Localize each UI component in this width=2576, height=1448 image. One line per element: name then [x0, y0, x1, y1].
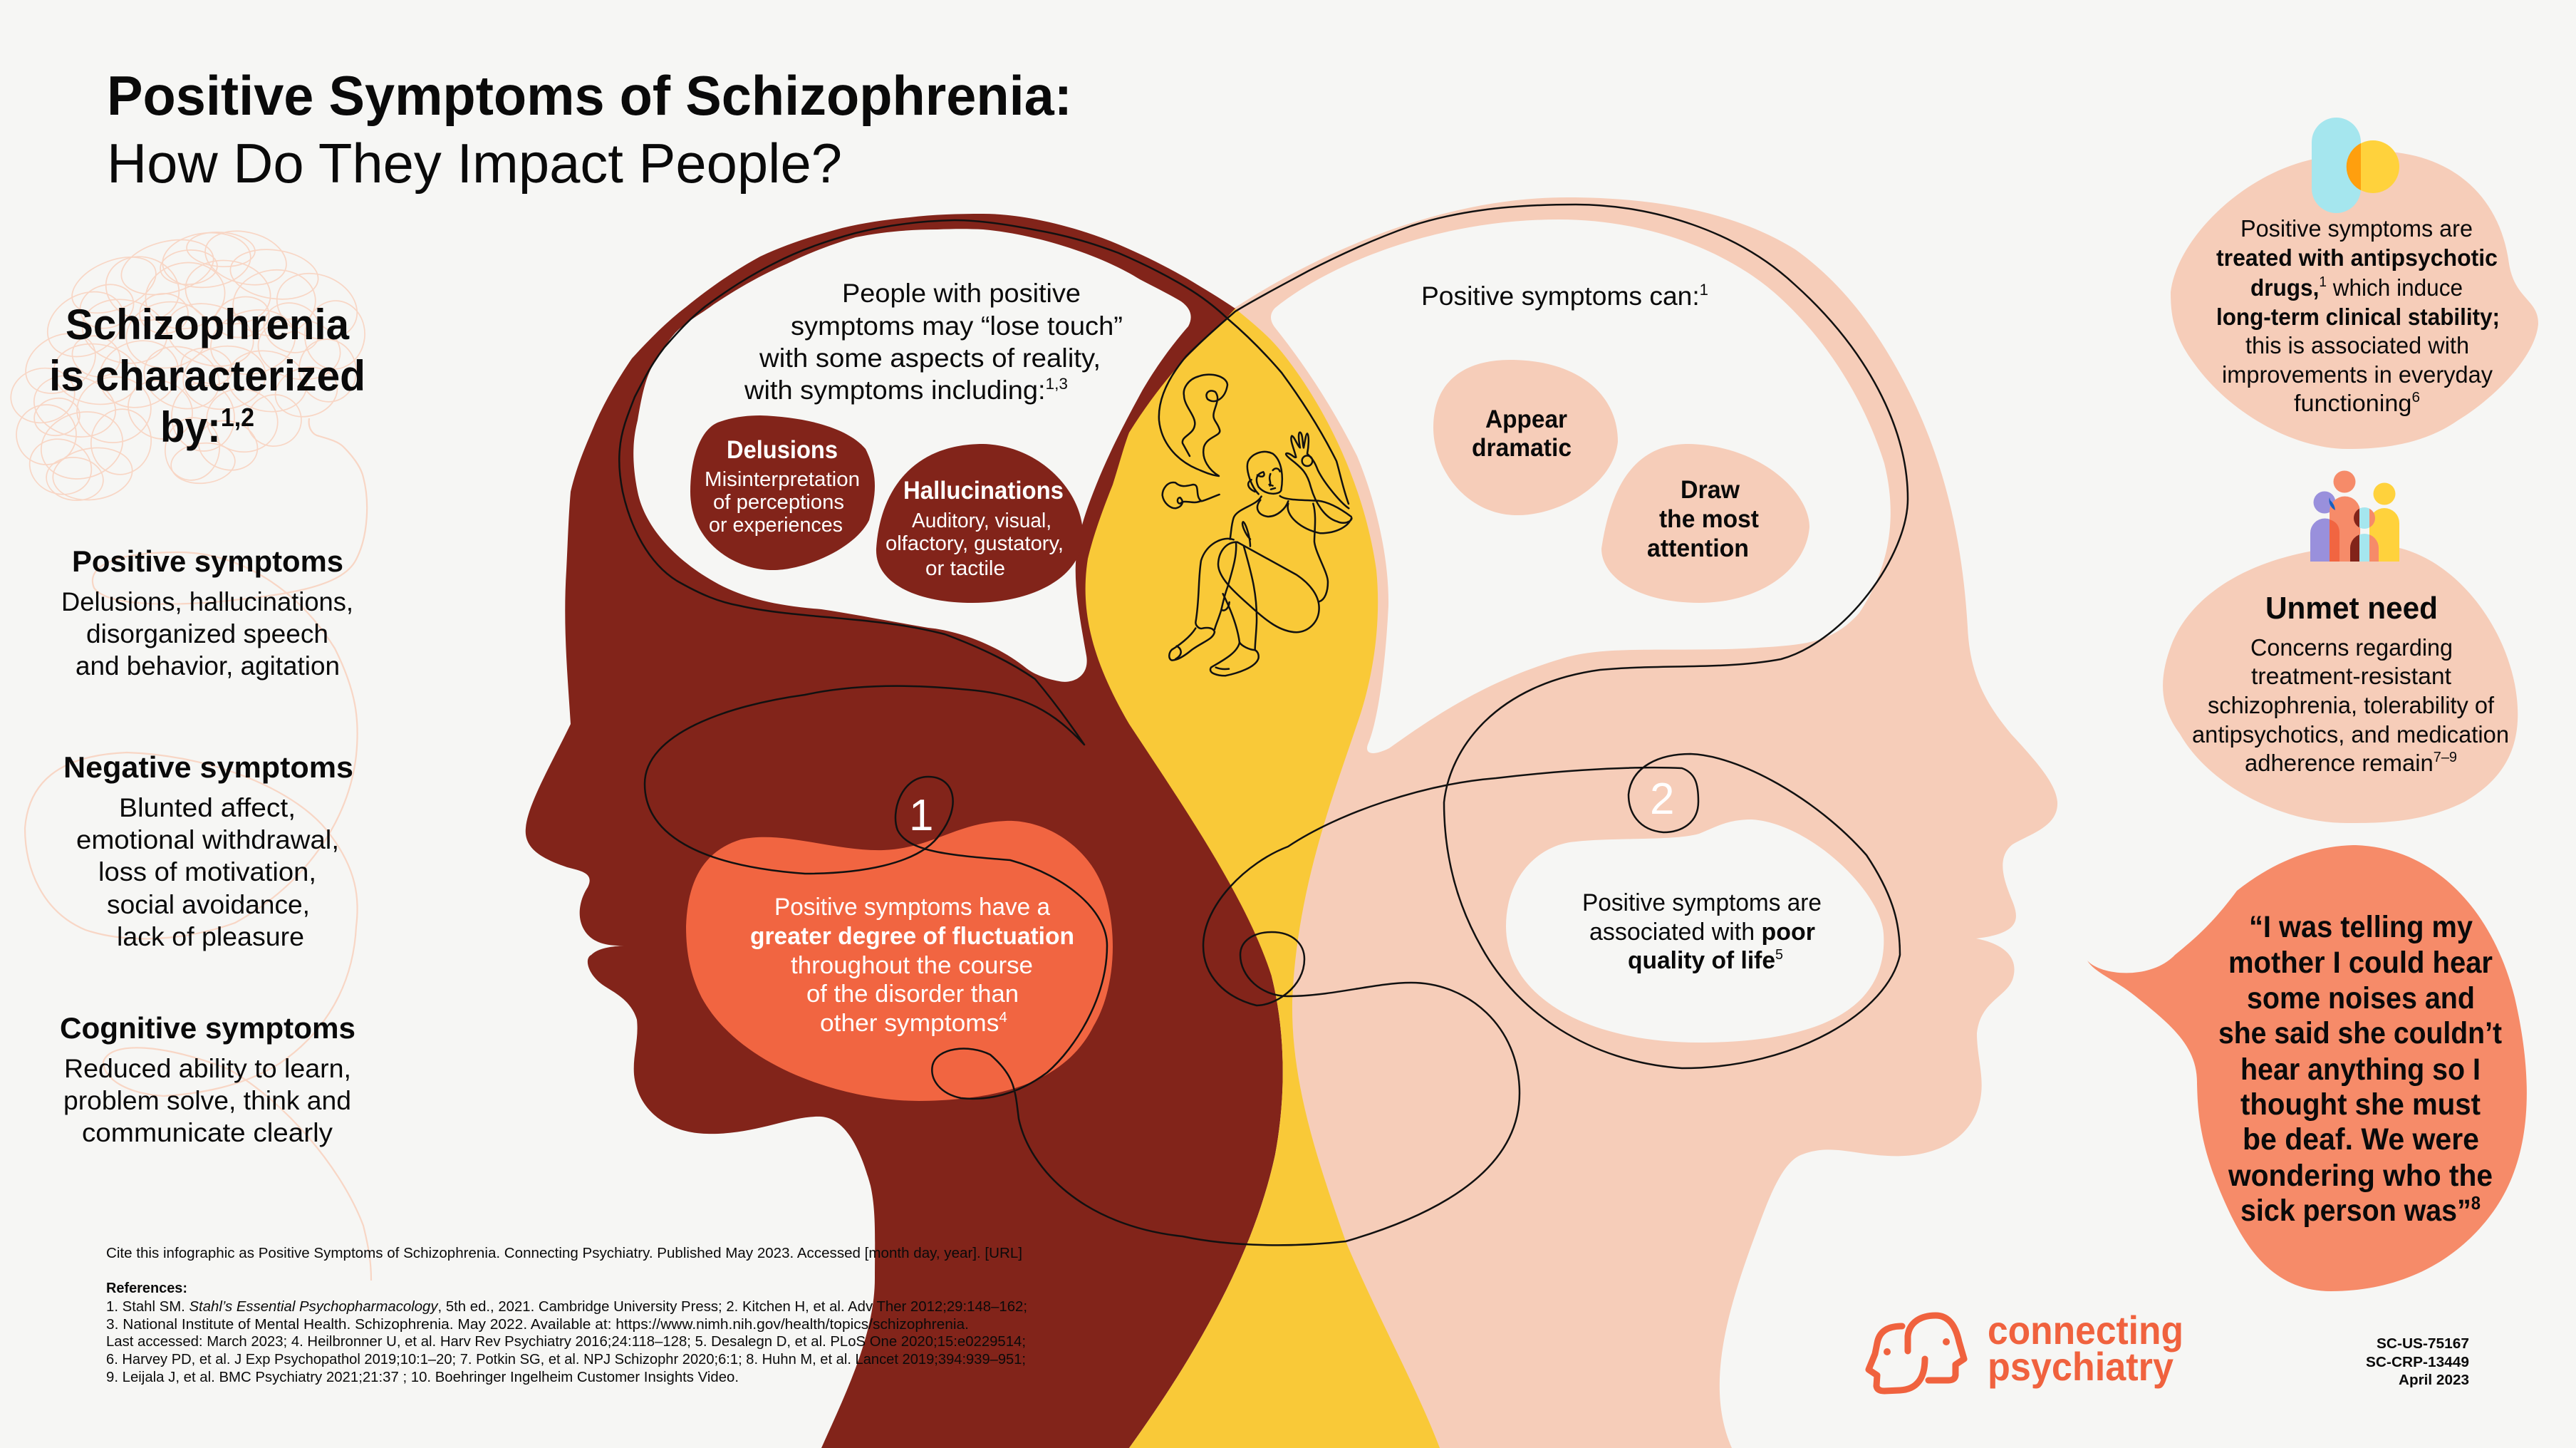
panel: patient quote speech bubble: sick person was” — [2240, 1194, 2493, 1228]
panel: antipsychotic treatment: improvements in everyday — [2222, 361, 2493, 388]
panel: antipsychotic treatment: Positive symptoms are — [2240, 215, 2473, 242]
text block: negative symptoms: lack of pleasure — [117, 922, 304, 951]
bubble: draw the most attention: Draw — [1681, 476, 1740, 504]
text block: positive symptoms — [61, 544, 353, 681]
bubble: delusions: Delusions — [727, 436, 838, 464]
bubble: hallucinations: or tactile — [925, 557, 1005, 580]
left column heading — [49, 301, 365, 451]
text block: negative symptoms — [63, 750, 353, 951]
citation and references: 9. Leijala J, et al. BMC Psychiatry 2021;21:37 ; 10. Boehringer Ingelheim Customer Insights Video. — [106, 1369, 739, 1385]
panel: antipsychotic treatment: this is associated with — [2245, 332, 2469, 358]
panel: patient quote speech bubble: wondering who the — [2228, 1159, 2493, 1193]
bubble: delusions: Misinterpretation — [705, 468, 860, 491]
text block: cognitive symptoms: Reduced ability to learn, — [64, 1054, 351, 1083]
left column heading: 1,2 — [221, 403, 254, 432]
text: positive symptoms can: Positive symptoms can: — [1421, 281, 1698, 311]
left column heading: by: — [160, 403, 224, 451]
bubble: hallucinations: olfactory, gustatory, — [886, 532, 1064, 555]
citation and references: 6. Harvey PD, et al. J Exp Psychopathol 2019;10:1–20; 7. Potkin SG, et al. NPJ Schizophr 2020;6:1; 8. Huhn M, et al. Lancet 2019;394:939–951; — [106, 1351, 1026, 1367]
panel: left head brain text: with symptoms including: — [744, 376, 1037, 405]
icon: pill capsules — [2312, 118, 2399, 213]
text block: negative symptoms: loss of motivation, — [98, 857, 316, 886]
panel: unmet need: 7–9 — [2434, 750, 2457, 765]
icon: two head outlines — [1869, 1315, 1964, 1391]
text block: cognitive symptoms — [60, 1011, 355, 1147]
logo: connecting psychiatry: psychiatry — [1988, 1344, 2174, 1389]
panel: antipsychotic treatment: drugs, — [2250, 274, 2319, 301]
panel: left head brain text: 1,3 — [1046, 375, 1068, 393]
panel: unmet need — [2163, 470, 2518, 823]
text block: cognitive symptoms: Cognitive symptoms — [60, 1011, 355, 1045]
citation and references: Last accessed: March 2023; 4. Heilbronner U, et al. Harv Rev Psychiatry 2016;24:118–128; 5. Desalegn D, et al. PLoS One 2020;15:e0229514; — [106, 1333, 1026, 1350]
text: quality of life: 5 — [1775, 947, 1783, 963]
panel: unmet need: Unmet need — [2265, 591, 2438, 626]
bubble: hallucinations: Auditory, visual, — [912, 510, 1051, 532]
panel: patient quote speech bubble: 8 — [2471, 1192, 2481, 1214]
yellow overlap of the two heads — [1086, 309, 1440, 1448]
panel: patient quote speech bubble — [2087, 845, 2527, 1291]
text: quality of life: associated with poor — [1589, 919, 1815, 946]
citation and references: 1. Stahl SM. Stahl’s Essential Psychopharmacology, 5th ed., 2021. Cambridge University Press; 2. Kitchen H, et al. Adv Ther 2012;29:148–162; — [106, 1298, 1027, 1315]
panel: antipsychotic treatment: treated with antipsychotic — [2216, 244, 2498, 271]
text block: cognitive symptoms: problem solve, think and — [63, 1086, 351, 1115]
text: fluctuation: of the disorder than — [806, 981, 1019, 1008]
text: fluctuation: 4 — [999, 1010, 1007, 1025]
text block: negative symptoms: social avoidance, — [107, 890, 310, 919]
text: fluctuation: Positive symptoms have a — [774, 894, 1050, 921]
panel: patient quote speech bubble: she said she couldn’t — [2218, 1016, 2502, 1050]
panel: patient quote speech bubble: be deaf. We were — [2243, 1122, 2479, 1157]
text block: positive symptoms: Positive symptoms — [72, 544, 343, 578]
text block: negative symptoms: Blunted affect, — [119, 793, 296, 822]
panel: patient quote speech bubble: mother I could hear — [2228, 946, 2493, 980]
text: quality of life: Positive symptoms are — [1582, 889, 1822, 916]
text: fluctuation: throughout the course — [791, 952, 1033, 979]
text: quality of life — [1582, 889, 1822, 974]
left column heading: is characterized — [49, 352, 365, 400]
bubble: appear dramatic: Appear — [1485, 405, 1567, 433]
bubble: delusions: or experiences — [709, 514, 843, 537]
illustration: seated person with hand raised — [1163, 433, 1351, 676]
panel: left head brain text: with some aspects of reality, — [759, 343, 1101, 373]
orange bubble shape — [686, 821, 1113, 1101]
document codes: SC-US-75167 — [2377, 1336, 2469, 1352]
text block: negative symptoms: Negative symptoms — [63, 750, 353, 784]
text block: cognitive symptoms: communicate clearly — [82, 1118, 333, 1147]
panel: patient quote speech bubble: some noises and — [2247, 981, 2475, 1015]
panel: patient quote speech bubble: “I was telling my — [2249, 910, 2473, 944]
panel: left head brain text: People with positive — [842, 279, 1081, 308]
panel: antipsychotic treatment: which induce — [2327, 274, 2463, 301]
panel: unmet need: schizophrenia, tolerability of — [2208, 692, 2495, 718]
panel: patient quote speech bubble: hear anything so I — [2240, 1053, 2481, 1087]
logo: connecting psychiatry: connecting — [1988, 1308, 2183, 1353]
citation and references: 3. National Institute of Mental Health. Schizophrenia. May 2022. Available at: https://www.nimh.nih.gov/health/topics/schizophrenia. — [106, 1316, 969, 1333]
right head silhouette — [1232, 197, 2057, 1448]
text: fluctuation: greater degree of fluctuation — [750, 923, 1074, 950]
text: fluctuation: other symptoms — [820, 1010, 992, 1037]
white bubble shape — [1506, 819, 1884, 1043]
left column heading: Schizophrenia — [66, 301, 350, 348]
bubble: draw the most attention: the most — [1659, 505, 1759, 533]
left head silhouette — [526, 214, 1318, 1448]
document codes: April 2023 — [2399, 1372, 2469, 1388]
citation and references: References: — [106, 1280, 187, 1296]
panel: unmet need: treatment-resistant — [2251, 663, 2451, 689]
text: positive symptoms can: 1 — [1700, 281, 1708, 299]
panel: left head brain text — [744, 279, 1123, 405]
title: How Do They Impact People? — [107, 132, 842, 195]
icon: group of people — [2310, 470, 2399, 562]
number 2: 2 — [1650, 775, 1674, 824]
bubble: draw the most attention: attention — [1647, 534, 1749, 562]
panel: antipsychotic treatment: 6 — [2411, 390, 2420, 405]
bubble: draw the most attention — [1601, 444, 1809, 603]
text block: positive symptoms: Delusions, hallucinations, — [61, 587, 353, 616]
bubble: hallucinations: Hallucinations — [903, 477, 1064, 505]
panel: left head brain text: symptoms may “lose touch” — [791, 311, 1123, 341]
title — [107, 64, 1072, 195]
panel: unmet need: antipsychotics, and medication — [2192, 721, 2509, 748]
decorative pink thread — [25, 418, 371, 1281]
bubble: delusions — [690, 415, 875, 570]
text block: positive symptoms: disorganized speech — [86, 619, 328, 648]
panel: patient quote speech bubble: thought she must — [2240, 1087, 2481, 1122]
bubble: appear dramatic: dramatic — [1472, 434, 1572, 462]
panel: antipsychotic treatment: 1 — [2319, 274, 2327, 290]
number 1: 1 — [909, 791, 933, 840]
bubble: appear dramatic — [1433, 360, 1618, 515]
logo: connecting psychiatry — [1869, 1308, 2183, 1391]
panel: unmet need: adherence remain — [2245, 750, 2434, 776]
text: fluctuation — [750, 894, 1074, 1037]
panel: antipsychotic treatment: long-term clinical stability; — [2216, 304, 2500, 330]
document codes — [2366, 1336, 2469, 1388]
citation and references — [106, 1245, 1027, 1385]
panel: antipsychotic treatment — [2171, 118, 2538, 449]
text block: positive symptoms: and behavior, agitation — [76, 651, 340, 681]
document codes: SC-CRP-13449 — [2366, 1355, 2469, 1370]
text: quality of life: quality of life — [1628, 947, 1777, 974]
icon: scribbled brain — [6, 223, 368, 505]
title: Positive Symptoms of Schizophrenia: — [107, 64, 1072, 127]
citation and references: Cite this infographic as Positive Symptoms of Schizophrenia. Connecting Psychiatry. Published May 2023. Accessed [month day, year]. [URL] — [106, 1245, 1022, 1261]
panel: unmet need: Concerns regarding — [2250, 634, 2453, 661]
bubble: delusions: of perceptions — [713, 491, 844, 514]
bubble: hallucinations — [876, 444, 1083, 603]
panel: antipsychotic treatment: functioning — [2294, 390, 2408, 416]
text block: negative symptoms: emotional withdrawal, — [76, 825, 339, 854]
continuous black line joining the two heads — [619, 205, 1908, 1245]
